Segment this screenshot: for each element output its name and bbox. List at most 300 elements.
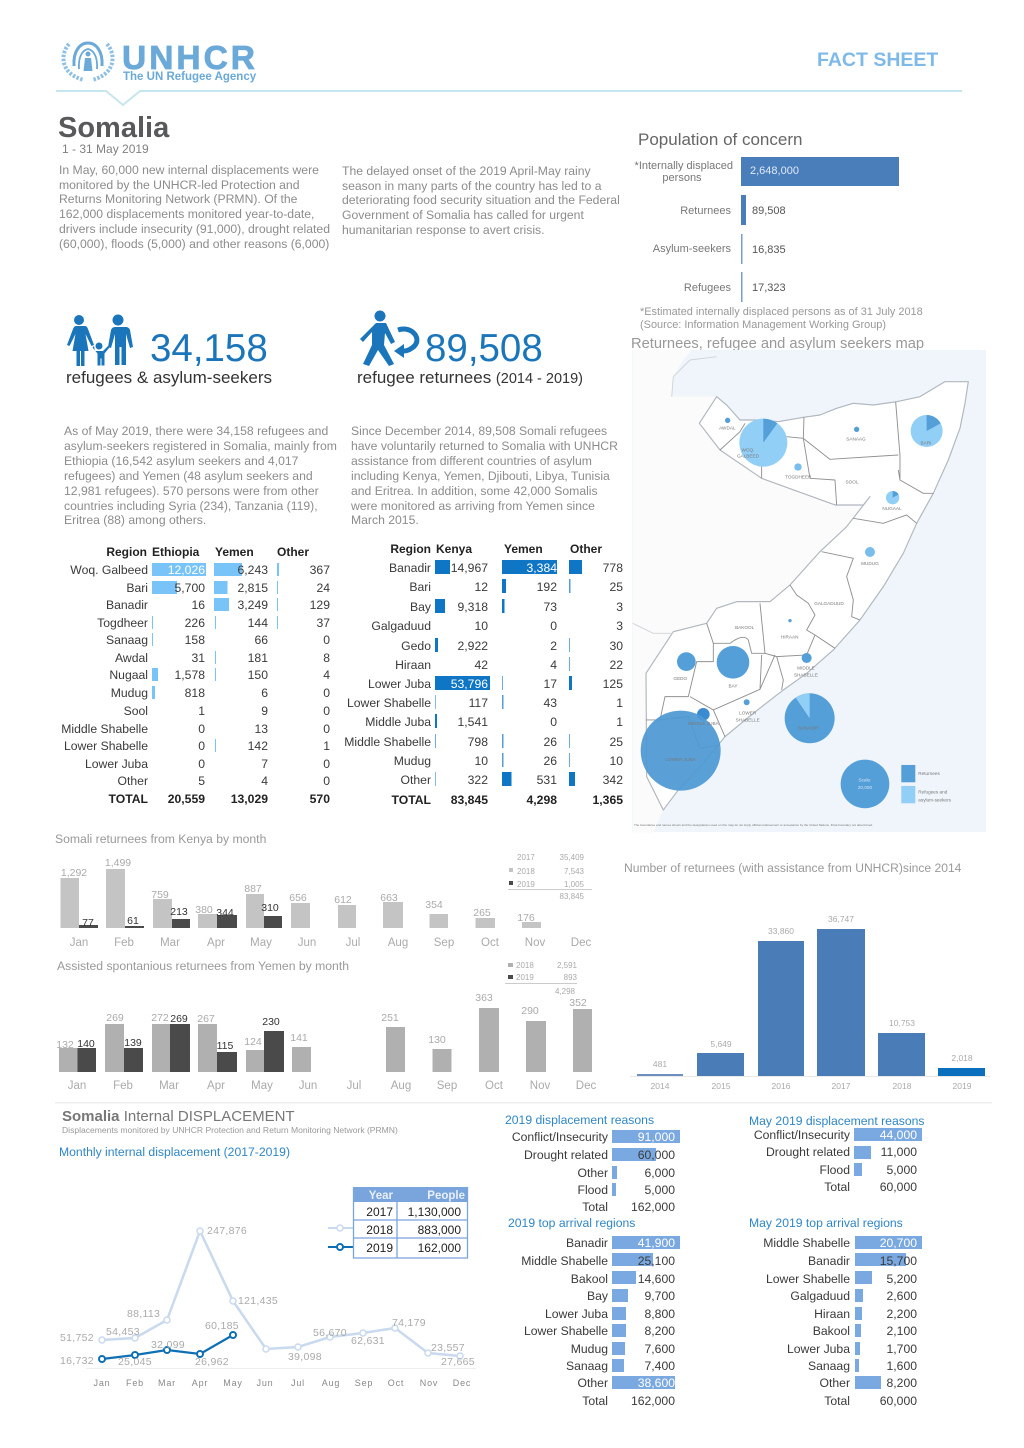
Yemen values: 2 [550, 639, 557, 653]
month axis: Aug [391, 1080, 411, 1092]
2018 value labels: 759 [151, 889, 169, 901]
logo wordmark: UNHCR [122, 40, 258, 77]
text block: rainy season: The delayed onset of the 2019 April-May rainy [342, 164, 592, 178]
table: May top arrival regions: 5,200 [886, 1272, 917, 1286]
month axis: Dec [576, 1080, 596, 1092]
icon: walking returnee [360, 310, 417, 366]
map labels: AWDAL [719, 425, 736, 430]
table: May top arrival regions: 1,600 [886, 1359, 917, 1373]
Yemen values: 0 [550, 619, 557, 633]
table: 2019 top arrival regions: Bakool [571, 1272, 608, 1286]
table: 2019 displacement reasons: 6,000 [644, 1166, 675, 1180]
Ethiopia values: 226 [185, 616, 205, 630]
month axis: Dec [571, 937, 591, 949]
Yemen values: 26 [543, 735, 557, 749]
other values: 778 [603, 561, 623, 575]
heading: Number of returnees (with assistance from UNHCR)since 2014 [624, 861, 962, 875]
data labels: 26,962 [195, 1356, 229, 1368]
region labels: Galgaduud [371, 619, 431, 633]
table: people by year: People [427, 1190, 465, 1202]
other values [592, 561, 623, 807]
section heading: internal displacement [62, 1108, 398, 1135]
text block: May summary: Returns Monitoring Network (PRMN). Of the [59, 192, 298, 206]
data labels: 27,665 [441, 1356, 475, 1368]
map labels: MUDUG [861, 561, 879, 566]
map disclaimer: The boundaries and names shown and the designations used on this map do not imply official endorsement or acceptance by the United Nations. Final boundary not determined. [634, 823, 873, 827]
table: May displacement reasons: Total [824, 1180, 850, 1194]
text block: May summary: drivers include insecurity (91,000), drought related [59, 222, 330, 236]
2018 value labels: 663 [380, 892, 398, 904]
Yemen values: 9 [261, 704, 268, 718]
text block: returnees narrative: have voluntarily returned to Somalia with UNHCR [351, 439, 618, 453]
other values: 25 [609, 735, 623, 749]
header row: Yemen [215, 545, 254, 559]
table: 2019 top arrival regions: Lower Shabelle [524, 1324, 608, 1338]
Yemen values: 43 [543, 696, 557, 710]
panel: map [632, 350, 986, 833]
map labels [666, 425, 931, 790]
bar chart: Refugees [684, 282, 731, 294]
2018 value labels: 176 [517, 912, 535, 924]
region labels: Mudug [394, 754, 431, 768]
map labels: GALGADUUD [814, 601, 844, 606]
Yemen values: 6 [261, 686, 268, 700]
Kenya values: 14,967 [451, 561, 488, 575]
Kenya values: 53,796 [451, 677, 488, 691]
other values: 8 [323, 651, 330, 665]
Yemen values: 150 [248, 668, 268, 682]
table: 2019 displacement reasons: Drought related [524, 1148, 608, 1162]
text block: May summary: monitored by the UNHCR-led Protection and [59, 178, 299, 192]
data labels: 51,752 [60, 1332, 94, 1344]
2018 value labels [61, 857, 535, 924]
legend: 2019 [517, 880, 535, 889]
footnote: (Source: Information Management Working Group) [640, 319, 886, 331]
month axis: Sep [355, 1378, 373, 1388]
Kenya values: 42 [474, 658, 488, 672]
map labels: LOWER [739, 710, 757, 715]
bar chart: persons [662, 172, 702, 184]
text block: returnees narrative [350, 424, 618, 527]
header row: Other [570, 542, 602, 556]
map labels: MIDDLE JUBA [688, 721, 720, 726]
2018 value labels: 354 [425, 899, 443, 911]
map labels: WOQ. [742, 448, 754, 453]
bar chart: 2017 [832, 1081, 851, 1091]
2018 bars [59, 1008, 592, 1072]
bar chart: 16,835 [752, 244, 786, 256]
map labels: GALBEED [737, 453, 760, 458]
text block: returnees narrative: were monitored as arriving from Yemen since [350, 499, 595, 513]
2019 value labels [82, 902, 279, 929]
text block: May summary: (60,000), floods (5,000) and other reasons (6,000) [59, 237, 329, 251]
table: people by year: 1,130,000 [408, 1205, 461, 1219]
header row: Other [277, 545, 309, 559]
table: May top arrival regions: 1,700 [886, 1342, 917, 1356]
legend: 2018 [517, 867, 535, 876]
text block: refugees narrative: 12,981 refugees). 570 persons were from other [64, 484, 319, 498]
month axis: Jul [291, 1378, 305, 1388]
table: May top arrival regions: Hiraan [814, 1307, 850, 1321]
legend: 1,005 [564, 880, 585, 889]
table: people by year: Year [369, 1190, 394, 1202]
chart heading: Yemen: Assisted spontanious returnees from Yemen by month [57, 959, 349, 973]
header row [390, 542, 602, 556]
table: May top arrival regions: 15,700 [880, 1254, 917, 1268]
table: May top arrival regions [763, 1236, 922, 1408]
Ethiopia values: 1,578 [174, 668, 205, 682]
bar chart: 5,649 [710, 1039, 732, 1049]
2019 value labels: 115 [217, 1040, 234, 1052]
neighbouring land [633, 350, 870, 833]
map labels: BAY [728, 684, 737, 689]
region labels: Woq. Galbeed [70, 563, 148, 577]
Ethiopia values: 5 [198, 774, 205, 788]
region labels: Gedo [401, 639, 431, 653]
table: May top arrival regions: Sanaag [808, 1359, 850, 1373]
legend: 7,543 [564, 867, 585, 876]
region labels: Lower Juba [85, 757, 148, 771]
proportional circles [641, 415, 943, 808]
text block: refugees narrative: refugees) and Yemen (48 asylum seekers and [64, 469, 313, 483]
Yemen values: 2,815 [238, 581, 268, 595]
bar chart: 481 [653, 1059, 667, 1069]
table: refugees by region [61, 545, 330, 806]
map heading: Returnees, refugee and asylum seekers map [631, 336, 924, 352]
table: 2019 top arrival regions: Mudug [571, 1342, 608, 1356]
region labels: TOTAL [392, 793, 432, 807]
Yemen values: 531 [537, 773, 557, 787]
Ethiopia values: 818 [185, 686, 205, 700]
other values: 37 [316, 616, 330, 630]
month axis: Sep [437, 1080, 457, 1092]
text block: returnees narrative: including Kenya, Yemen, Djibouti, Libya, Tunisia [351, 469, 610, 483]
legend: 2017 [517, 853, 535, 862]
legend [508, 853, 592, 901]
region borders [633, 357, 933, 748]
Kenya values [451, 561, 488, 807]
Yemen values: 181 [248, 651, 268, 665]
Yemen values [231, 563, 268, 806]
table: 2019 displacement reasons: 5,000 [644, 1183, 675, 1197]
Kenya values: 83,845 [451, 793, 488, 807]
Yemen values: 192 [537, 580, 557, 594]
date: 1 - 31 May 2019 [62, 142, 149, 156]
bar chart: *Internally displaced [635, 160, 733, 172]
region labels: Togdheer [97, 616, 148, 630]
table: May displacement reasons: 5,000 [886, 1163, 917, 1177]
map labels: Scale: [858, 778, 871, 783]
month axis: Mar [159, 1080, 179, 1092]
2019 value labels: 140 [77, 1038, 95, 1050]
table: people by year: 162,000 [418, 1241, 461, 1255]
region labels: Banadir [106, 598, 148, 612]
2019 value labels: 139 [124, 1037, 142, 1049]
month axis: Apr [207, 937, 225, 949]
2018 value labels: 251 [381, 1012, 399, 1024]
region labels: Sanaag [106, 633, 148, 647]
table: 2019 displacement reasons: 162,000 [631, 1200, 675, 1214]
month axis: May [223, 1378, 243, 1388]
line chart: monthly displacement [60, 1225, 476, 1388]
Kenya values: 2,922 [458, 639, 488, 653]
text block: rainy season: Government of Somalia has called for urgent [342, 208, 584, 222]
header row: Region [390, 542, 431, 556]
map labels: SHABELLE [794, 673, 818, 678]
table: 2019 top arrival regions: 9,700 [644, 1289, 675, 1303]
table: 2019 top arrival regions: Bay [587, 1289, 609, 1303]
Kenya values: 12 [474, 580, 488, 594]
table: May displacement reasons: Flood [820, 1163, 850, 1177]
legend: 2019 [516, 973, 534, 982]
map labels: TOGDHEER [785, 474, 812, 479]
text block: rainy season [342, 164, 620, 237]
Kenya values: 9,318 [458, 600, 488, 614]
text block: rainy season: deteriorating food security situation and the Federal [342, 193, 620, 207]
Kenya values: 322 [468, 773, 488, 787]
legend: 4,298 [555, 987, 576, 996]
2019 value labels [77, 1013, 280, 1052]
table: May top arrival regions: 8,200 [886, 1376, 917, 1390]
region labels: Lower Juba [368, 677, 431, 691]
Yemen values: 26 [543, 754, 557, 768]
table: 2019 displacement reasons: 91,000 [638, 1130, 675, 1144]
data labels: 32,099 [151, 1339, 185, 1351]
map legend [901, 765, 952, 803]
2018 value labels: 1,292 [61, 867, 87, 879]
bar chart: 36,747 [828, 914, 854, 924]
section divider [55, 1102, 992, 1104]
Ethiopia values: 0 [198, 757, 205, 771]
Yemen values: 73 [543, 600, 557, 614]
icon: UNHCR emblem [63, 43, 113, 80]
Yemen values: 4 [261, 774, 268, 788]
month axis: Dec [453, 1378, 471, 1388]
month axis: Mar [160, 937, 180, 949]
month axis: May [251, 1080, 273, 1092]
other values: 24 [316, 581, 330, 595]
table: 2019 top arrival regions: Middle Shabelle [521, 1254, 608, 1268]
logo wordmark: The UN Refugee Agency [123, 71, 257, 83]
table: 2019 top arrival regions: 38,600 [638, 1376, 675, 1390]
data labels: 39,098 [288, 1351, 322, 1363]
text block: rainy season: season in many parts of the country has led to a [342, 179, 602, 193]
other values [310, 563, 330, 806]
table: 2019 top arrival regions: 7,400 [644, 1359, 675, 1373]
other values: 0 [323, 722, 330, 736]
Yemen values: 3,384 [526, 561, 557, 575]
heading: Population of concern [638, 130, 802, 149]
other values: 129 [310, 598, 330, 612]
other values: 0 [323, 704, 330, 718]
month axis: Feb [126, 1378, 144, 1388]
heading: May top arrival regions: May 2019 top arrival regions [749, 1216, 903, 1230]
month axis: Mar [158, 1378, 176, 1388]
table: May displacement reasons: Drought related [766, 1145, 850, 1159]
legend: 2,591 [557, 961, 578, 970]
number: 34,158 [150, 327, 268, 370]
table: 2019 top arrival regions [521, 1236, 680, 1408]
table: May displacement reasons: 44,000 [880, 1128, 917, 1142]
month axis: Nov [420, 1378, 438, 1388]
other values: 1,365 [592, 793, 623, 807]
other values: 0 [323, 757, 330, 771]
table: May top arrival regions: Other [820, 1376, 850, 1390]
Kenya values: 798 [468, 735, 488, 749]
data labels: 121,435 [238, 1295, 278, 1307]
bar chart: 2018 [893, 1081, 912, 1091]
region labels: Other [401, 773, 431, 787]
bar chart: Yemen returnees by month [56, 961, 596, 1092]
other values: 4 [323, 668, 330, 682]
region labels: Middle Juba [365, 715, 431, 729]
map legend: Returnees [918, 771, 940, 776]
legend lines [328, 1225, 353, 1250]
region labels: Other [118, 774, 148, 788]
header row: Kenya [436, 542, 472, 556]
month axis [94, 1378, 471, 1388]
map labels: SHABELLE [736, 718, 760, 723]
table: May top arrival regions: 2,100 [886, 1324, 917, 1338]
month axis [68, 1080, 596, 1092]
text block: refugees narrative: countries including Syria (234), Tanzania (119), [64, 499, 318, 513]
table: 2019 displacement reasons: Other [578, 1166, 608, 1180]
data labels: 56,670 [313, 1327, 347, 1339]
legend [505, 961, 578, 996]
text block: rainy season: humanitarian response to avert crisis. [342, 223, 545, 237]
Yemen values: 0 [550, 715, 557, 729]
heading: May displacement reasons: May 2019 displacement reasons [749, 1114, 924, 1128]
text block: refugees narrative [64, 424, 337, 527]
bar chart: 10,753 [889, 1018, 915, 1028]
2018 value labels [56, 992, 587, 1051]
heading: 2019 displacement reasons: 2019 displacement reasons [505, 1113, 654, 1127]
header row: Yemen [504, 542, 543, 556]
text block: returnees narrative: March 2015. [351, 513, 419, 527]
2019 value labels: 310 [261, 902, 279, 914]
month axis: May [250, 937, 272, 949]
title: Somalia [58, 112, 170, 144]
text block: refugees narrative: asylum-seekers registered in Somalia, mainly from [64, 439, 337, 453]
bar chart: 2014 [651, 1081, 670, 1091]
2019 bars [79, 915, 282, 928]
Yemen values: 4,298 [526, 793, 557, 807]
other values: 367 [310, 563, 330, 577]
bar chart: 2,018 [951, 1053, 973, 1063]
Yemen values: 4 [550, 658, 557, 672]
stat: refugee returnees [357, 310, 583, 387]
table: 2019 top arrival regions: 14,600 [638, 1272, 675, 1286]
2018 value labels: 290 [521, 1005, 539, 1017]
bar chart [635, 157, 899, 302]
other values: 342 [603, 773, 623, 787]
region labels: TOTAL [108, 792, 149, 806]
2018 value labels: 124 [244, 1036, 262, 1048]
Yemen values: 13,029 [231, 792, 268, 806]
table: people by year [353, 1187, 468, 1258]
2019 value labels: 61 [127, 915, 139, 927]
map labels: LOWER JUBA [666, 757, 697, 762]
2018 value labels: 380 [195, 904, 213, 916]
table: May top arrival regions: Lower Shabelle [766, 1272, 850, 1286]
2018 value labels: 656 [289, 892, 307, 904]
month axis: Jun [298, 937, 316, 949]
Yemen values: 13 [254, 722, 268, 736]
table: returnees by region [344, 542, 623, 807]
data bars [435, 560, 582, 786]
region labels [344, 561, 432, 807]
panel: returnees since 2014 [624, 861, 990, 1091]
table: May top arrival regions: Galgaduud [790, 1289, 850, 1303]
table: 2019 top arrival regions: Other [578, 1376, 608, 1390]
table: 2019 top arrival regions: 162,000 [631, 1394, 675, 1408]
bar chart: Returnees [680, 205, 731, 217]
bar chart: 2016 [772, 1081, 791, 1091]
data labels: 74,179 [392, 1317, 426, 1329]
table: May top arrival regions: 2,600 [886, 1289, 917, 1303]
legend: 83,845 [560, 892, 585, 901]
map legend: Refugees and [918, 789, 948, 794]
region labels: Mudug [111, 686, 148, 700]
map labels: SOOL [846, 479, 859, 484]
Yemen values [526, 561, 557, 807]
month axis: Nov [530, 1080, 550, 1092]
month axis: Sep [434, 937, 454, 949]
bar chart: 2,648,000 [750, 165, 799, 177]
month axis: Aug [322, 1378, 340, 1388]
region labels: Bari [126, 581, 148, 595]
data labels: 25,045 [118, 1356, 152, 1368]
region labels: Lower Shabelle [64, 739, 148, 753]
chart heading: Kenya: Somali returnees from Kenya by month [55, 832, 266, 846]
table: 2019 top arrival regions: Sanaag [566, 1359, 608, 1373]
Yemen values: 66 [254, 633, 268, 647]
header row: Ethiopia [152, 545, 200, 559]
footnote: *Estimated internally displaced persons as of 31 July 2018 [640, 306, 923, 318]
text block: May summary [59, 163, 330, 251]
table: 2019 top arrival regions: Total [582, 1394, 608, 1408]
table: 2019 displacement reasons [512, 1130, 680, 1214]
2018 value labels: 887 [244, 883, 262, 895]
bar chart: 2015 [712, 1081, 731, 1091]
2018 value labels: 612 [334, 894, 352, 906]
caption: refugee returnees (2014 - 2019) [357, 368, 583, 387]
table: May top arrival regions: Bakool [813, 1324, 850, 1338]
map labels: GEDO [673, 676, 688, 681]
region labels [61, 563, 149, 806]
table: May displacement reasons: Conflict/Insecurity [754, 1128, 851, 1142]
header row: Region [106, 545, 147, 559]
bar chart: Asylum-seekers [653, 243, 731, 255]
bar chart: 89,508 [752, 205, 786, 217]
Yemen values: 144 [248, 616, 268, 630]
2018 value labels: 265 [473, 907, 491, 919]
month axis: Nov [525, 937, 545, 949]
2018 series [99, 1228, 463, 1359]
legend: 35,409 [560, 853, 585, 862]
month axis: Jul [346, 937, 360, 949]
other values: 0 [323, 686, 330, 700]
2019 value labels: 77 [82, 917, 94, 929]
data labels: 54,453 [106, 1326, 140, 1338]
table: May top arrival regions: Total [824, 1394, 850, 1408]
Yemen values: 3,249 [238, 598, 268, 612]
other values: 30 [609, 639, 623, 653]
2018 value labels: 272 [151, 1012, 169, 1024]
region labels: Nugaal [109, 668, 148, 682]
Kenya values: 10 [474, 619, 488, 633]
map labels: SANAAG [846, 437, 866, 442]
